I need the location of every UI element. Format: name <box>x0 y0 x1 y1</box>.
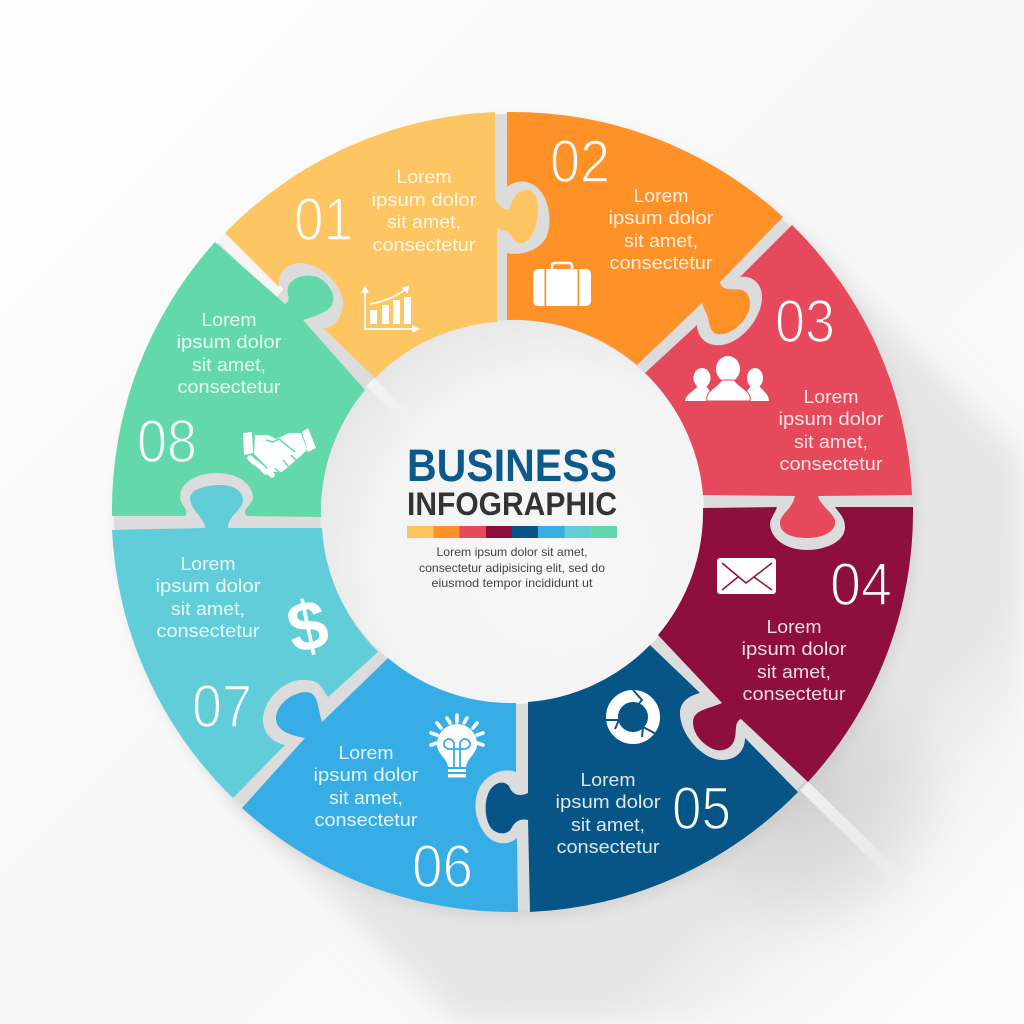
number 04: 04 <box>830 551 892 618</box>
heading: INFOGRAPHIC: INFOGRAPHIC <box>407 486 617 522</box>
text block 03: sit amet, <box>794 432 868 452</box>
text block 03 <box>778 387 884 474</box>
number 03: 03 <box>775 288 835 355</box>
text block 08 <box>176 310 282 397</box>
description text <box>419 545 605 590</box>
heading: BUSINESS: BUSINESS <box>407 440 617 491</box>
panel: 04 crimson <box>658 507 913 782</box>
number 06: 06 <box>412 833 473 900</box>
icon: people <box>685 356 769 401</box>
soft shadow around the ring <box>117 119 917 919</box>
text block 05: Lorem <box>580 770 636 790</box>
text block 05: sit amet, <box>571 815 645 835</box>
text block 02 <box>608 186 714 273</box>
text block 04: consectetur <box>742 684 846 704</box>
icon: dollar sign: $ <box>280 584 335 668</box>
text block 03: ipsum dolor <box>778 409 884 429</box>
icon: briefcase <box>533 263 591 306</box>
text block 07: consectetur <box>156 621 260 641</box>
icon: envelope <box>717 558 776 594</box>
text block 04: sit amet, <box>757 662 831 682</box>
text block 03: Lorem <box>804 387 858 407</box>
text block 02: sit amet, <box>624 231 698 251</box>
description text: Lorem ipsum dolor sit amet, <box>436 545 588 559</box>
text block 06: Lorem <box>338 743 394 763</box>
text block 04: ipsum dolor <box>742 639 846 659</box>
text block 02: Lorem <box>634 186 688 206</box>
text block 07: ipsum dolor <box>156 576 260 596</box>
text block 04: Lorem <box>766 617 822 637</box>
text block 02: ipsum dolor <box>608 208 714 228</box>
text block 03: consectetur <box>780 454 882 474</box>
gray ring behind the puzzle pieces <box>114 114 910 910</box>
icon: handshake <box>243 428 316 475</box>
icon: bar chart <box>362 287 418 332</box>
text block 01: sit amet, <box>387 212 461 232</box>
long shadow <box>229 229 1024 1024</box>
text block 01 <box>372 167 476 255</box>
center disc <box>320 320 704 704</box>
number 05: 05 <box>672 775 731 842</box>
panel: 07 teal <box>112 485 378 798</box>
panel: 06 blue <box>242 658 518 912</box>
text block 08: ipsum dolor <box>176 332 282 352</box>
title block <box>407 440 617 590</box>
text block 07: Lorem <box>180 554 236 574</box>
panel: 01 yellow <box>225 112 538 378</box>
number 02: 02 <box>550 128 610 195</box>
description text: consectetur adipisicing elit, sed do <box>419 561 605 575</box>
text block 07 <box>156 554 260 641</box>
text block 07: sit amet, <box>171 599 245 619</box>
text block 08: sit amet, <box>192 355 266 375</box>
panel: 02 orange <box>507 112 783 365</box>
number 08: 08 <box>137 408 197 475</box>
number 07: 07 <box>192 673 252 740</box>
text block 06: consectetur <box>314 810 418 830</box>
text block 01: ipsum dolor <box>372 190 476 210</box>
text block 05: consectetur <box>556 837 660 857</box>
text block 01: Lorem <box>396 167 452 187</box>
text block 08: Lorem <box>202 310 256 330</box>
text block 05 <box>556 770 660 857</box>
number 01: 01 <box>294 186 353 253</box>
text block 08: consectetur <box>178 377 280 397</box>
panel: 03 red <box>645 225 912 538</box>
icon: light bulb <box>431 715 483 778</box>
text block 06: sit amet, <box>329 788 403 808</box>
text block 06: ipsum dolor <box>314 765 418 785</box>
panel: 05 navy <box>486 645 798 912</box>
color legend bar <box>407 526 617 538</box>
text block 05: ipsum dolor <box>556 792 660 812</box>
text block 06 <box>314 743 418 830</box>
text block 01: consectetur <box>372 235 476 255</box>
text block 04 <box>742 617 846 704</box>
text block 02: consectetur <box>610 253 712 273</box>
icon: cycle arrows <box>606 690 658 738</box>
description text: eiusmod tempor incididunt ut <box>432 576 593 590</box>
panel: 08 green <box>112 242 365 517</box>
